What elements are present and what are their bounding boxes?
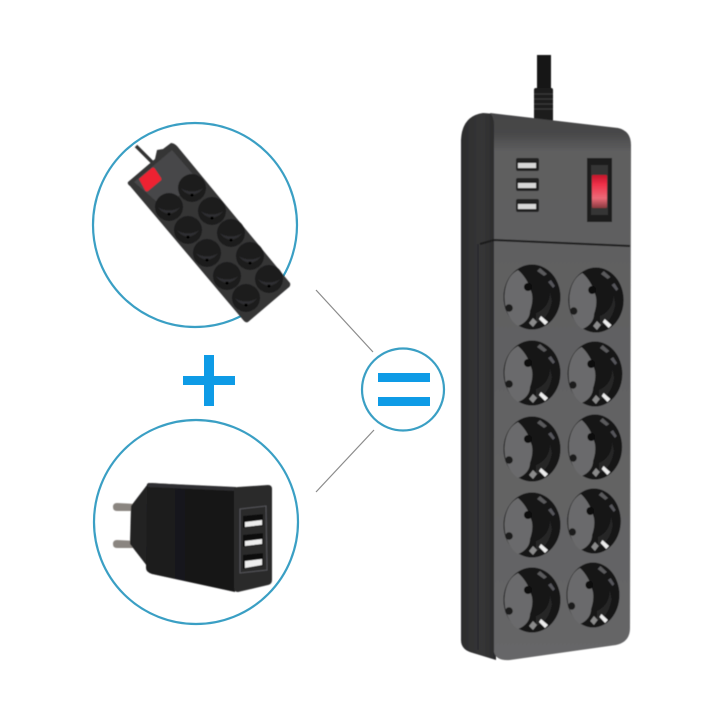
connector line: top circle to equals — [316, 290, 373, 352]
small power strip — [128, 143, 290, 322]
connector line: bottom circle to equals — [316, 430, 374, 492]
USB port 3 — [243, 553, 263, 569]
panel: main power strip — [461, 55, 631, 660]
icon: equals sign in circle — [362, 348, 444, 430]
icon: plus — [183, 355, 235, 406]
seam — [480, 240, 630, 246]
strip side — [461, 113, 496, 660]
rocker switch — [587, 158, 612, 222]
circle outline: bottom — [94, 420, 298, 624]
USB ports — [516, 158, 539, 212]
switch: red — [139, 168, 161, 191]
panel: power strip in top circle — [93, 123, 297, 327]
strip front face — [490, 113, 631, 660]
USB port 2 — [243, 533, 263, 547]
circle outline: top — [93, 123, 297, 327]
sockets: right column — [566, 268, 624, 628]
sockets: left column — [504, 264, 560, 632]
power cord — [534, 55, 553, 122]
USB port 1 — [243, 514, 263, 528]
USB charger — [113, 483, 272, 592]
panel: USB charger in bottom circle — [94, 420, 298, 624]
